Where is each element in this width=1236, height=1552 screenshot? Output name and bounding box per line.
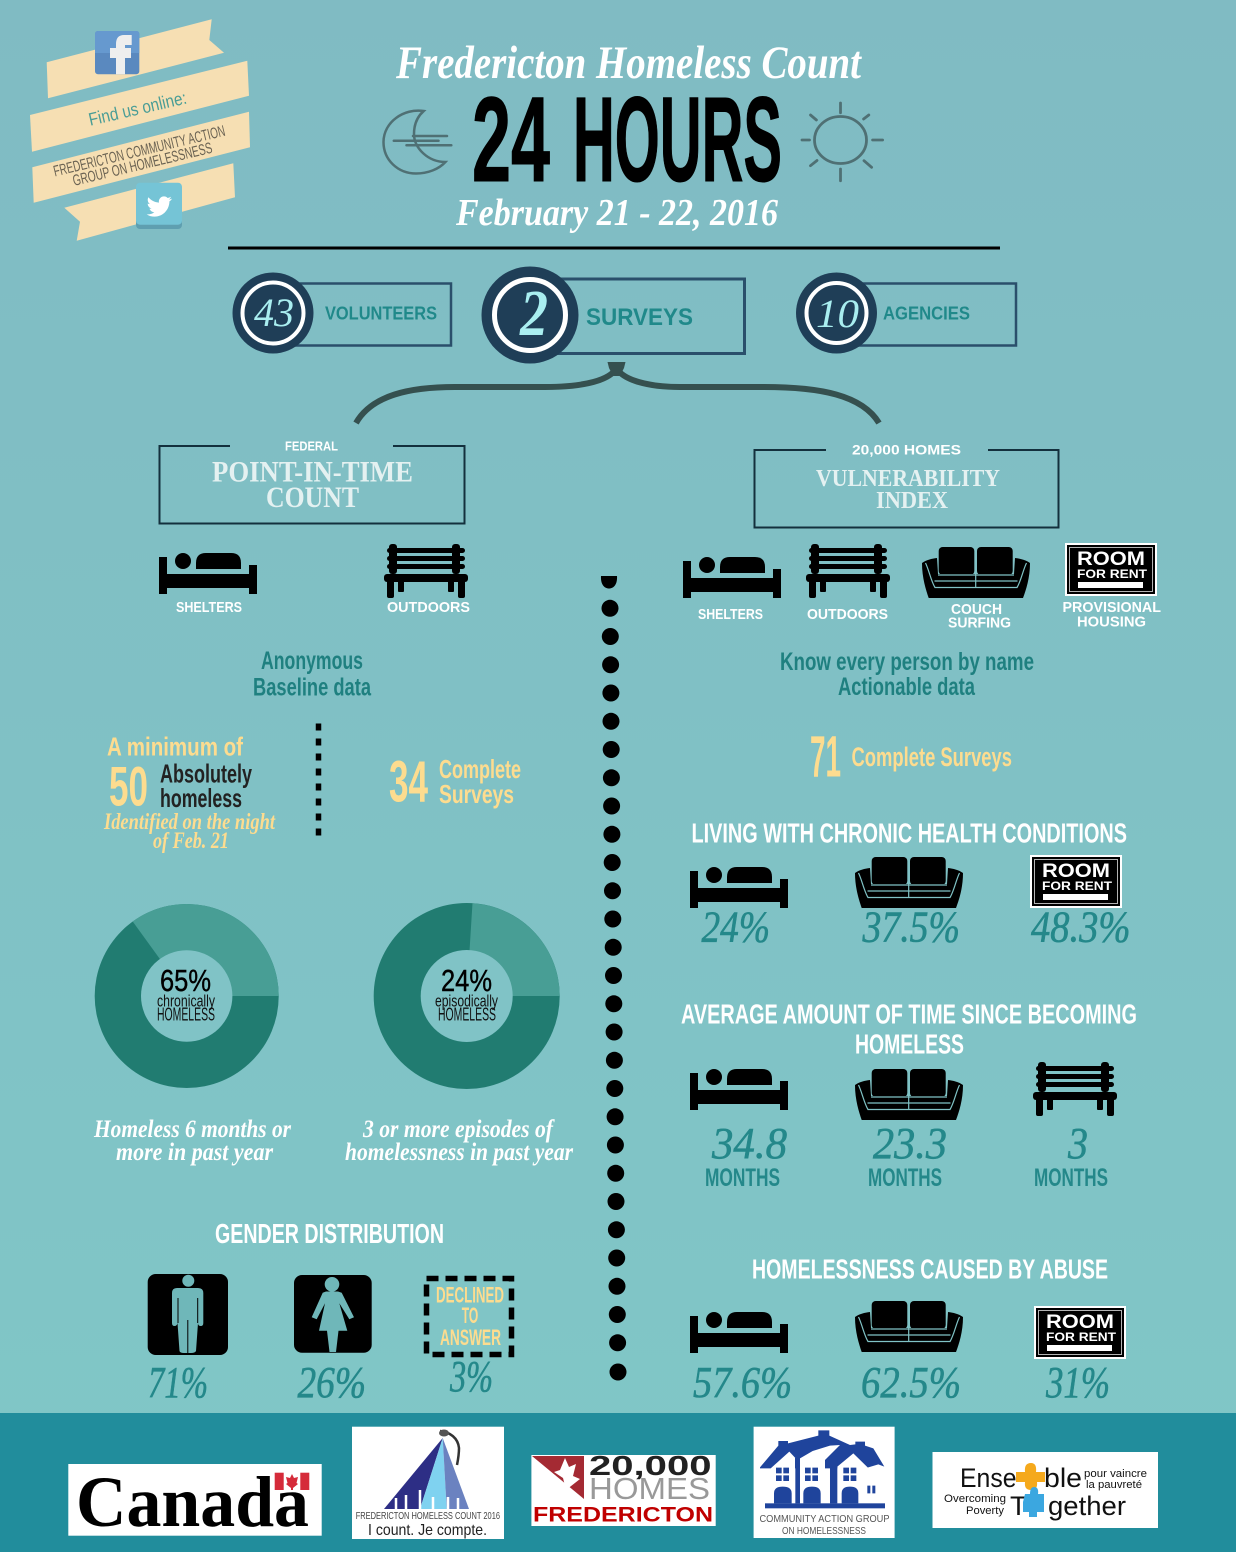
caption: 3 or more episodes: homelessness in past year [345, 1139, 573, 1166]
dashed separator [316, 724, 321, 836]
icon: declined to answer box: ANSWER [440, 1325, 501, 1350]
donut chart: 65% chronically homeless [95, 904, 279, 1088]
stat: 43 volunteers: 43 [254, 290, 294, 335]
stat: 43 volunteers: VOLUNTEERS [325, 304, 437, 324]
icon: bench [1033, 1062, 1117, 1116]
caption: 3 or more episodes: 3 or more episodes of [362, 1116, 555, 1143]
logo: i count je compte: I count. Je compte. [368, 1522, 487, 1539]
value: 34.8 months [705, 1119, 787, 1192]
logo: 20,000 homes fredericton: FREDERICTON [533, 1504, 713, 1527]
callout: minimum of 50 absolutely homeless: of Feb. 21 [153, 828, 229, 853]
panel: chronic health conditions [690, 818, 1130, 952]
text: anonymous baseline data: Baseline data [253, 674, 372, 702]
donut chart: 24% episodically homeless: HOMELESS [438, 1005, 496, 1025]
callout: 71 complete surveys: Complete Surveys [852, 742, 1012, 772]
label: provisional housing [1062, 599, 1161, 631]
text: know every person: Actionable data [838, 673, 976, 701]
title: 24 hours [472, 71, 782, 207]
donut chart: 65% chronically homeless: 65% [160, 963, 211, 998]
stat: 10 agencies [796, 272, 1016, 354]
value: 34.8 months: 34.8 [711, 1119, 787, 1168]
label: outdoors: OUTDOORS [387, 599, 470, 616]
stat: 43 volunteers [232, 272, 451, 354]
value: 23.3 months: MONTHS [868, 1164, 942, 1192]
caption: 3 or more episodes [345, 1116, 573, 1166]
panel: point-in-time heading [160, 439, 464, 524]
text: anonymous baseline data [253, 647, 372, 702]
brace connector [356, 362, 879, 423]
logo: 20,000 homes fredericton: 20,000 [589, 1450, 712, 1481]
panel: average time homeless [681, 998, 1137, 1192]
panel: caused by abuse [690, 1254, 1126, 1407]
callout: minimum of 50 absolutely homeless: Identified on the night [103, 809, 275, 834]
callout: 34 complete surveys: Surveys [439, 779, 514, 809]
callout: minimum of 50 absolutely homeless: Absolutely [160, 759, 252, 789]
icon: outdoor bench [806, 544, 890, 598]
donut chart: 24% episodically homeless: episodically [435, 992, 498, 1010]
text: know every person [780, 648, 1034, 701]
icon: declined to answer box [426, 1278, 512, 1354]
value: 3 months [1034, 1119, 1108, 1192]
heading: GENDER DISTRIBUTION [215, 1218, 444, 1249]
text: anonymous baseline data: Anonymous [261, 647, 363, 675]
value: 62.5%: 62.5% [861, 1358, 961, 1407]
icon: moon [384, 111, 451, 174]
icon: room for rent sign [1065, 543, 1157, 596]
label: couch surfing: SURFING [948, 615, 1011, 632]
icon: couch [922, 547, 1030, 598]
donut chart: 65% chronically homeless: HOMELESS [157, 1005, 215, 1025]
logo: i count je compte: FREDERICTON HOMELESS COUNT 2016 [356, 1511, 500, 1522]
icon: room for rent sign: FOR RENT [1042, 879, 1113, 893]
icon: facebook [95, 31, 139, 74]
title block [384, 37, 883, 234]
heading: HOMELESS [855, 1028, 964, 1060]
value: 24%: 24% [702, 903, 770, 952]
divider [228, 246, 1000, 250]
label: provisional housing: PROVISIONAL [1062, 599, 1161, 616]
logo: 20,000 homes fredericton [531, 1450, 716, 1527]
value: 23.3 months [868, 1119, 947, 1192]
icon: bed [690, 1069, 788, 1110]
icon: man [148, 1274, 228, 1355]
icon: room for rent sign [1030, 855, 1122, 908]
caption: homeless 6 months: more in past year [116, 1139, 273, 1166]
icon: shelter bed [683, 557, 781, 598]
panel: gender distribution [148, 1218, 511, 1407]
title: fredericton homeless count: Fredericton Homeless Count [395, 37, 863, 89]
icon: room for rent sign: FOR RENT [1077, 567, 1148, 581]
label: provisional housing: HOUSING [1077, 614, 1146, 631]
caption: homeless 6 months: Homeless 6 months or [93, 1116, 291, 1143]
icon: woman [294, 1275, 372, 1353]
donut chart: 65% chronically homeless: chronically [157, 992, 215, 1010]
panel: vulnerability index heading: INDEX [876, 488, 949, 514]
icon: declined to answer box: DECLINED [436, 1283, 504, 1308]
logo: i count je compte [352, 1427, 504, 1539]
logo: ensemble overcoming poverty together: Poverty [966, 1505, 1005, 1517]
donut chart: 24% episodically homeless: 24% [441, 963, 492, 998]
icon: room for rent sign: FOR RENT [1046, 1330, 1117, 1344]
icon: room for rent sign: ROOM [1042, 861, 1110, 882]
logo: ensemble overcoming poverty together: pour vaincre [1084, 1468, 1147, 1480]
callout: 71 complete surveys [810, 725, 1012, 790]
panel: vulnerability index heading [754, 442, 1058, 528]
label: shelters: SHELTERS [176, 599, 242, 616]
panel: point-in-time heading: FEDERAL [285, 439, 338, 454]
icon: bed [690, 1312, 788, 1353]
icon: declined to answer box: TO [462, 1303, 478, 1328]
caption: homeless 6 months [93, 1116, 291, 1166]
logo: community action group: COMMUNITY ACTION GROUP [760, 1514, 890, 1525]
value: 34.8 months: MONTHS [705, 1164, 780, 1192]
text: find us online: Find us online: [87, 88, 189, 130]
label: couch surfing [948, 601, 1011, 632]
icon: couch [855, 1301, 963, 1352]
icon: twitter [136, 183, 182, 229]
value: 23.3 months: 23.3 [873, 1119, 947, 1168]
panel: vulnerability index heading: 20,000 HOMES [852, 442, 961, 458]
footer band [0, 1413, 1236, 1552]
logo: ensemble overcoming poverty together: Ense [960, 1463, 1016, 1493]
icon: room for rent sign: ROOM [1046, 1312, 1114, 1333]
icon: shelter bed [159, 553, 257, 594]
icon: room for rent sign [1034, 1306, 1126, 1359]
value: 31%: 31% [1045, 1358, 1110, 1407]
icon: sun [802, 103, 883, 181]
logo: canada: Canada [76, 1462, 309, 1542]
donut chart: 24% episodically homeless [374, 903, 560, 1089]
title: date: February 21 - 22, 2016 [455, 192, 778, 234]
ribbon: find us online [30, 19, 250, 241]
panel: vulnerability index locations [683, 543, 1161, 632]
label: outdoors: OUTDOORS [807, 606, 888, 623]
callout: 34 complete surveys [389, 750, 521, 815]
callout: 34 complete surveys: Complete [439, 754, 521, 784]
value: 37.5%: 37.5% [862, 903, 960, 952]
stat: 10 agencies: 10 [816, 291, 859, 336]
value: 3%: 3% [449, 1352, 493, 1401]
text: fredericton community action group: FREDERICTON COMMUNITY ACTION [52, 123, 227, 180]
title: 24 hours: 24 [472, 71, 550, 207]
logo: ensemble overcoming poverty together: ble [1044, 1463, 1082, 1493]
panel: point-in-time heading: POINT-IN-TIME [212, 456, 413, 488]
logo: ensemble overcoming poverty together: gether [1048, 1491, 1126, 1521]
text: fredericton community action group [52, 123, 230, 194]
label: couch surfing: COUCH [951, 601, 1002, 618]
icon: bed [690, 867, 788, 908]
icon: couch [855, 1069, 963, 1120]
value: 3 months: MONTHS [1034, 1164, 1108, 1192]
value: 48.3%: 48.3% [1031, 903, 1130, 952]
text: fredericton community action group: GROUP ON HOMELESSNESS [71, 140, 214, 190]
callout: minimum of 50 absolutely homeless: A minimum of [107, 732, 243, 762]
icon: room for rent sign: ROOM [1077, 549, 1145, 570]
stat: 10 agencies: AGENCIES [883, 304, 970, 324]
panel: federal count locations [159, 544, 470, 616]
label: shelters: SHELTERS [698, 606, 763, 623]
panel: point-in-time heading: COUNT [266, 481, 359, 514]
title block: HOURS [573, 71, 782, 207]
callout: minimum of 50 absolutely homeless: homeless [160, 783, 242, 813]
icon: couch [855, 857, 963, 908]
logo: ensemble overcoming poverty together: la pauvreté [1086, 1479, 1142, 1491]
value: 57.6%: 57.6% [693, 1358, 792, 1407]
logo: 20,000 homes fredericton: HOMES [589, 1471, 710, 1506]
logo: ensemble overcoming poverty together: T [1010, 1491, 1027, 1521]
logo: ensemble overcoming poverty together: Overcoming [944, 1493, 1006, 1505]
value: 71%: 71% [148, 1358, 208, 1407]
value: 26%: 26% [298, 1358, 366, 1407]
text: know every person: Know every person by name [780, 648, 1034, 676]
value: 3 months: 3 [1067, 1119, 1088, 1168]
logo: ensemble overcoming poverty together [932, 1452, 1158, 1528]
callout: 71 complete surveys: 71 [810, 725, 841, 790]
icon: outdoor bench [384, 544, 468, 598]
callout: 34 complete surveys: 34 [389, 750, 428, 815]
stat: 2 surveys [482, 266, 744, 364]
heading [681, 998, 1137, 1060]
dotted vertical divider [601, 576, 626, 1380]
stat: 2 surveys: SURVEYS [586, 304, 693, 331]
callout: minimum of 50 absolutely homeless [103, 732, 275, 853]
stat: 2 surveys: 2 [519, 277, 548, 350]
panel: vulnerability index heading: VULNERABILITY [816, 466, 1000, 492]
callout: minimum of 50 absolutely homeless: 50 [109, 755, 148, 818]
logo: community action group: ON HOMELESSNESS [782, 1526, 866, 1537]
logo: community action group [754, 1427, 895, 1538]
